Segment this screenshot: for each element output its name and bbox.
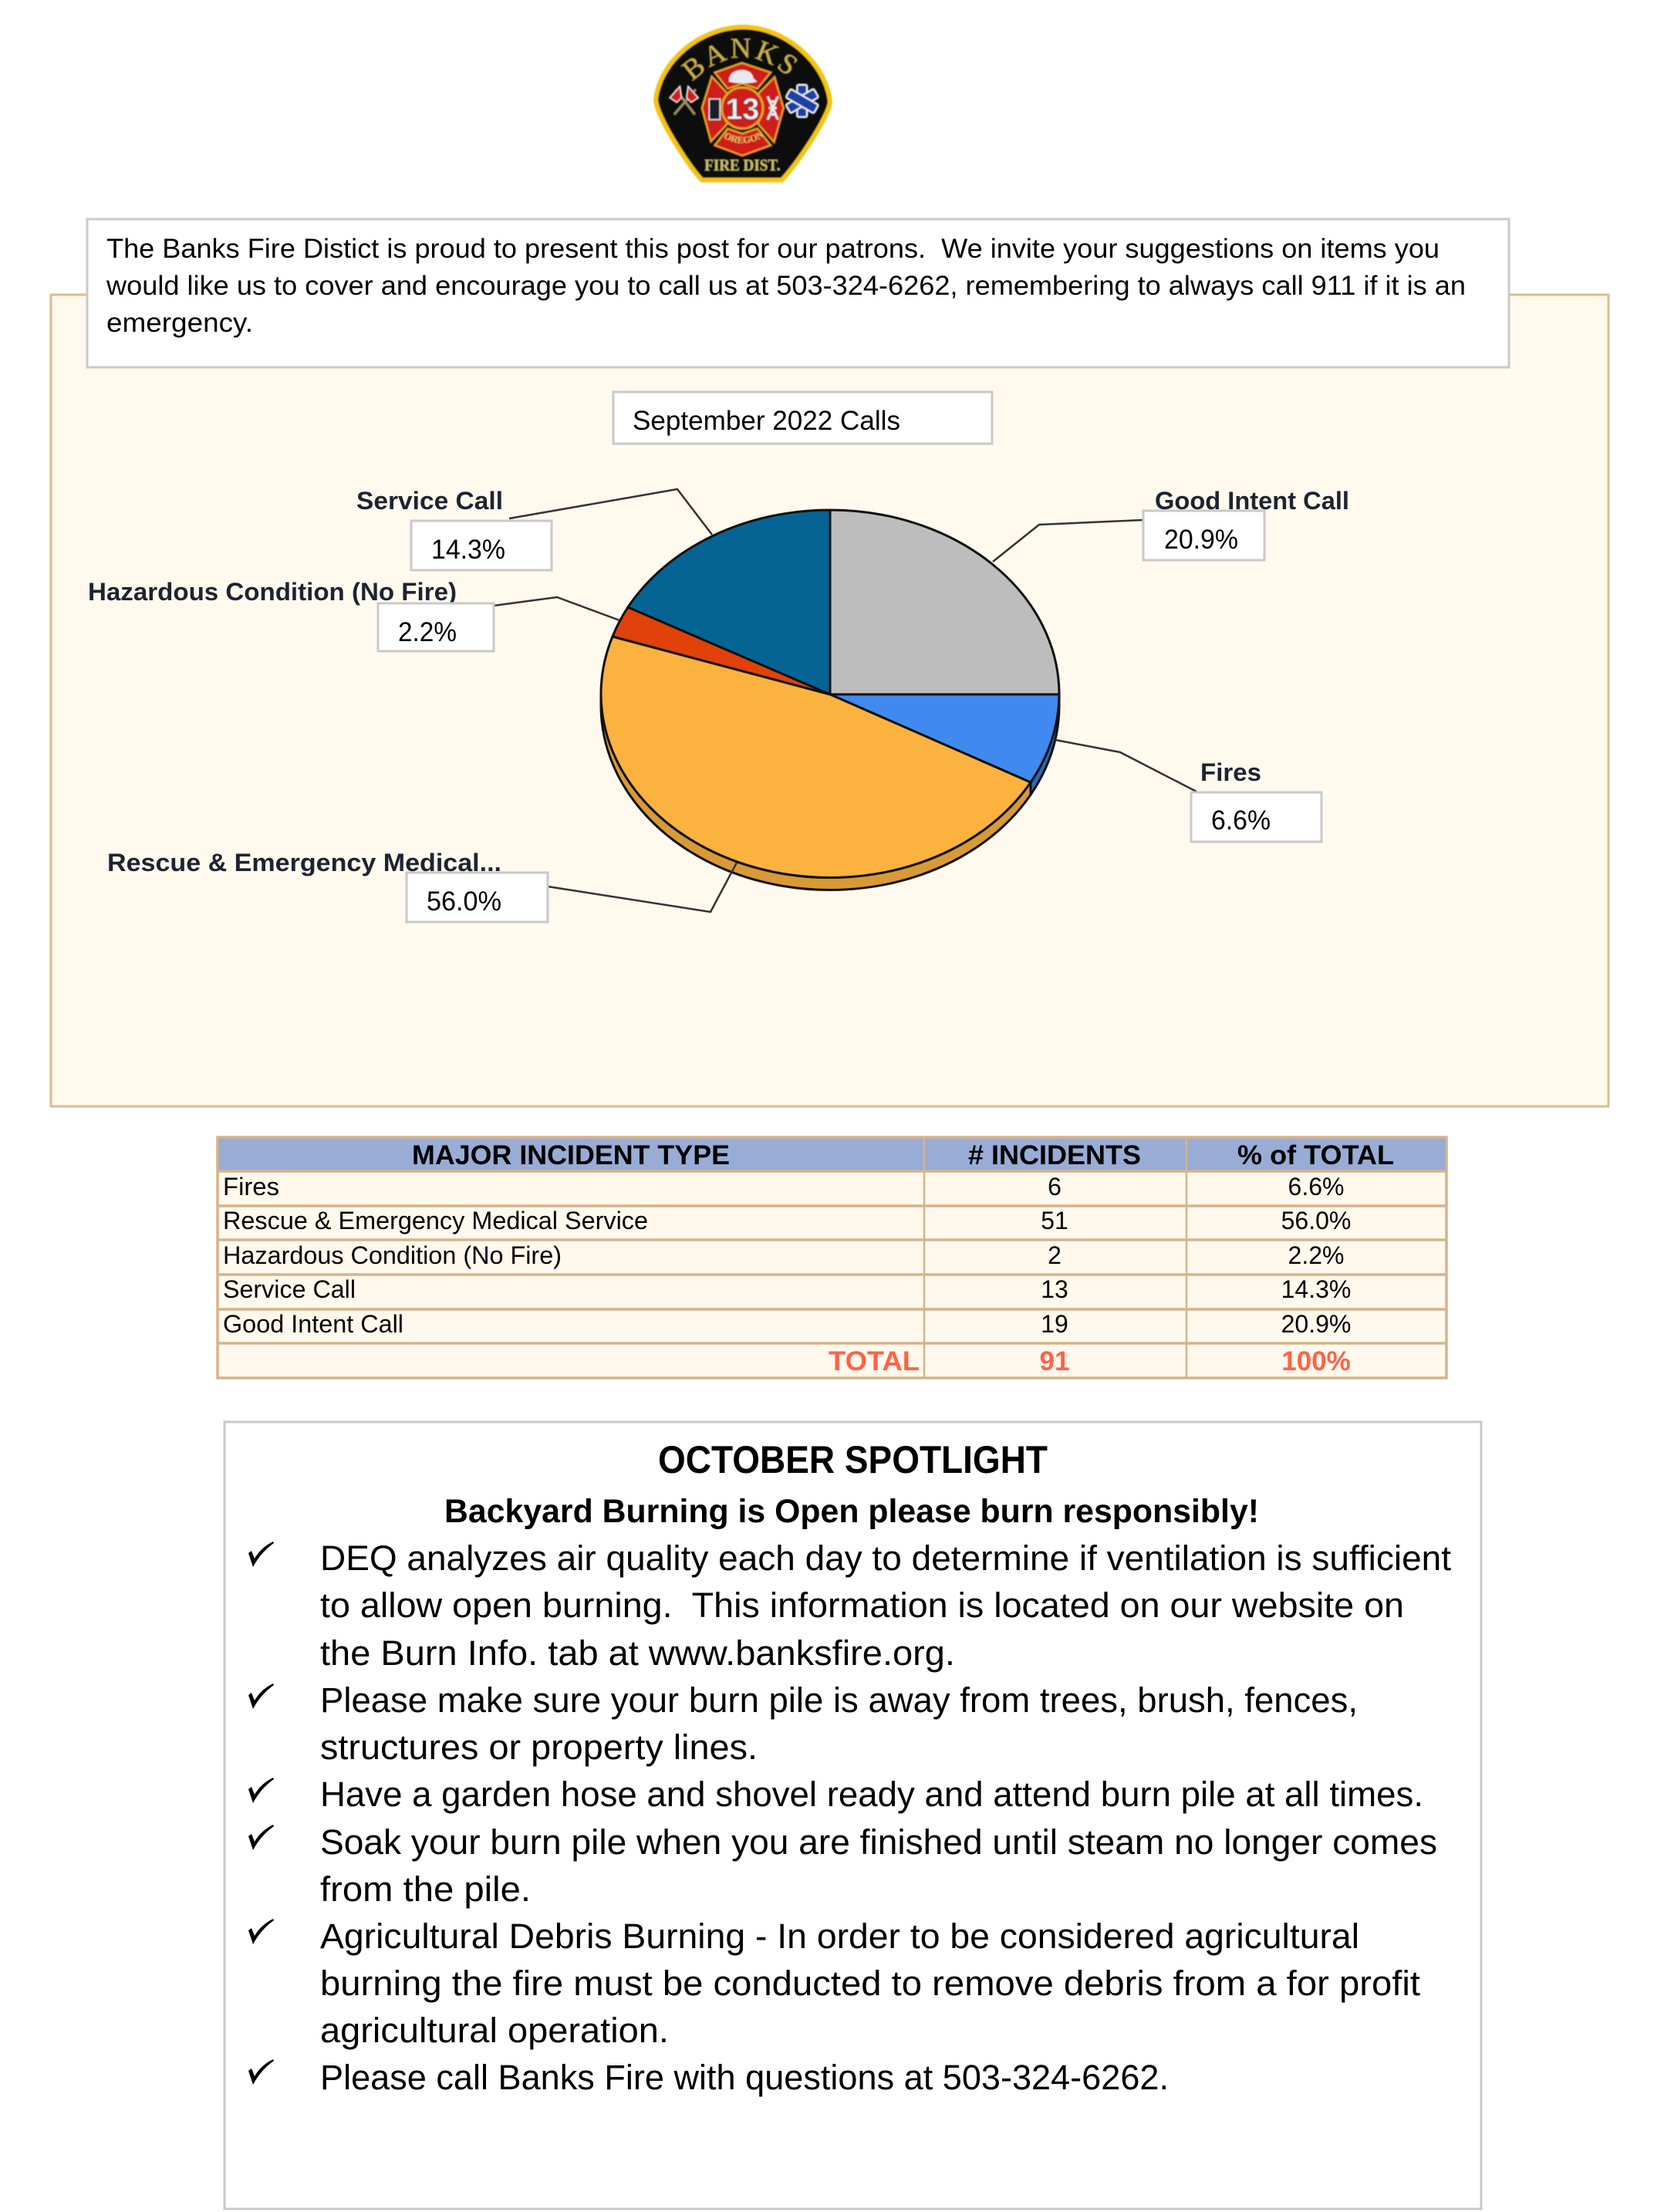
icon: Banks Fire District logo patch: FIRE DIST.	[704, 157, 780, 174]
callout: Service Call: Service Call	[356, 487, 503, 515]
table rows: Hazardous Condition (No Fire)	[223, 1241, 562, 1269]
chart title box	[613, 392, 992, 444]
table rows: 56.0%	[1281, 1207, 1351, 1234]
table header: MAJOR INCIDENT TYPE	[412, 1140, 730, 1170]
icons: check marks	[248, 1542, 274, 2085]
callout: Fires: Fires	[1200, 758, 1261, 786]
callout: Hazardous Condition: Hazardous Condition (No Fire)	[88, 578, 457, 606]
icon: Banks Fire District logo patch: BANKS	[680, 37, 798, 82]
callout: Rescue and Emergency Medical: 56.0%	[427, 886, 501, 917]
slice: Hazardous Condition	[613, 607, 830, 694]
slice: Rescue and Emergency Medical	[601, 637, 1031, 877]
panel: October spotlight	[224, 1422, 1481, 2209]
table rows: 51	[1041, 1207, 1068, 1234]
intro text box: emergency.	[106, 308, 253, 338]
intro text box	[87, 219, 1509, 367]
spotlight bullet list: burning the fire must be conducted to remove debris from a for profit	[320, 1964, 1421, 2003]
spotlight bullet list: Please make sure your burn pile is away from trees, brush, fences,	[320, 1680, 1358, 1720]
spotlight bullet list: Soak your burn pile when you are finished until steam no longer comes	[320, 1822, 1437, 1862]
table total row: 100%	[1281, 1346, 1351, 1376]
callout: Good Intent Call: 20.9%	[1164, 525, 1238, 555]
table rows: Good Intent Call	[223, 1310, 403, 1338]
icon: Banks Fire District logo patch: 13	[725, 92, 759, 126]
callout: Service Call	[356, 487, 712, 570]
spotlight bullet list: to allow open burning. This information is located on our website on	[320, 1586, 1404, 1625]
callout: Service Call: 14.3%	[431, 535, 505, 565]
spotlight bullet list: DEQ analyzes air quality each day to determine if ventilation is sufficient	[320, 1538, 1452, 1578]
spotlight bullet list: from the pile.	[320, 1869, 531, 1909]
table rows: 6.6%	[1288, 1173, 1344, 1201]
table rows: 20.9%	[1281, 1310, 1351, 1338]
table header: # INCIDENTS	[968, 1140, 1141, 1170]
spotlight bullet list: the Burn Info. tab at www.banksfire.org.	[320, 1633, 955, 1673]
spotlight bullet list: Agricultural Debris Burning - In order to be considered agricultural	[320, 1917, 1359, 1956]
callout: Good Intent Call	[993, 487, 1349, 562]
callout: Hazardous Condition: 2.2%	[398, 617, 457, 647]
table total row: TOTAL	[829, 1346, 920, 1376]
callout: Good Intent Call: Good Intent Call	[1155, 487, 1349, 515]
spotlight subheading: Backyard Burning is Open please burn responsibly!	[444, 1493, 1259, 1530]
table rows: Rescue & Emergency Medical Service	[223, 1207, 648, 1234]
table rows: 2	[1048, 1241, 1062, 1269]
slice: Service Call	[628, 510, 830, 694]
table rows: Fires	[223, 1173, 279, 1201]
callout: Hazardous Condition	[88, 578, 619, 651]
table rows: 2.2%	[1288, 1241, 1344, 1269]
pie side: orange depth	[601, 694, 1031, 890]
pie side: blue depth	[1031, 694, 1059, 795]
callout: Rescue and Emergency Medical	[107, 849, 737, 922]
spotlight heading: OCTOBER SPOTLIGHT	[658, 1438, 1048, 1481]
callout: Fires: 6.6%	[1211, 805, 1271, 836]
table rows: 6	[1048, 1173, 1062, 1201]
table rows: 19	[1041, 1310, 1068, 1338]
icon: Banks Fire District logo patch	[653, 23, 833, 184]
spotlight bullet list: Have a garden hose and shovel ready and attend burn pile at all times.	[320, 1775, 1423, 1814]
table rows: 13	[1041, 1275, 1068, 1303]
table total row: 91	[1040, 1346, 1069, 1376]
spotlight bullet list: agricultural operation.	[320, 2011, 669, 2050]
intro text box: The Banks Fire Distict is proud to present this post for our patrons. We invite your suggestions on items you	[106, 234, 1440, 264]
pie chart: September 2022 calls by type	[601, 510, 1059, 890]
table header: % of TOTAL	[1237, 1140, 1394, 1170]
chart title box: September 2022 Calls	[633, 406, 900, 436]
spotlight bullet list: Please call Banks Fire with questions at 503-324-6262.	[320, 2058, 1169, 2097]
panel: chart background	[51, 295, 1608, 1106]
table rows: 14.3%	[1281, 1275, 1351, 1303]
table header	[412, 1140, 1394, 1170]
spotlight bullet list	[320, 1538, 1452, 2097]
table rows: Service Call	[223, 1275, 356, 1303]
table rows	[223, 1173, 1351, 1338]
intro text box: would like us to cover and encourage you to call us at 503-324-6262, remembering to always call 911 if it is an	[106, 271, 1466, 301]
table total row	[829, 1346, 1351, 1376]
callout: Fires	[1055, 740, 1321, 842]
callout: Rescue and Emergency Medical: Rescue & Emergency Medical...	[107, 849, 501, 876]
spotlight bullet list: structures or property lines.	[320, 1727, 758, 1767]
table: major incident types	[218, 1137, 1446, 1378]
slice: Good Intent Call	[830, 510, 1059, 694]
slice: Fires	[830, 694, 1059, 782]
icon: Banks Fire District logo patch: OREGON	[724, 130, 764, 144]
